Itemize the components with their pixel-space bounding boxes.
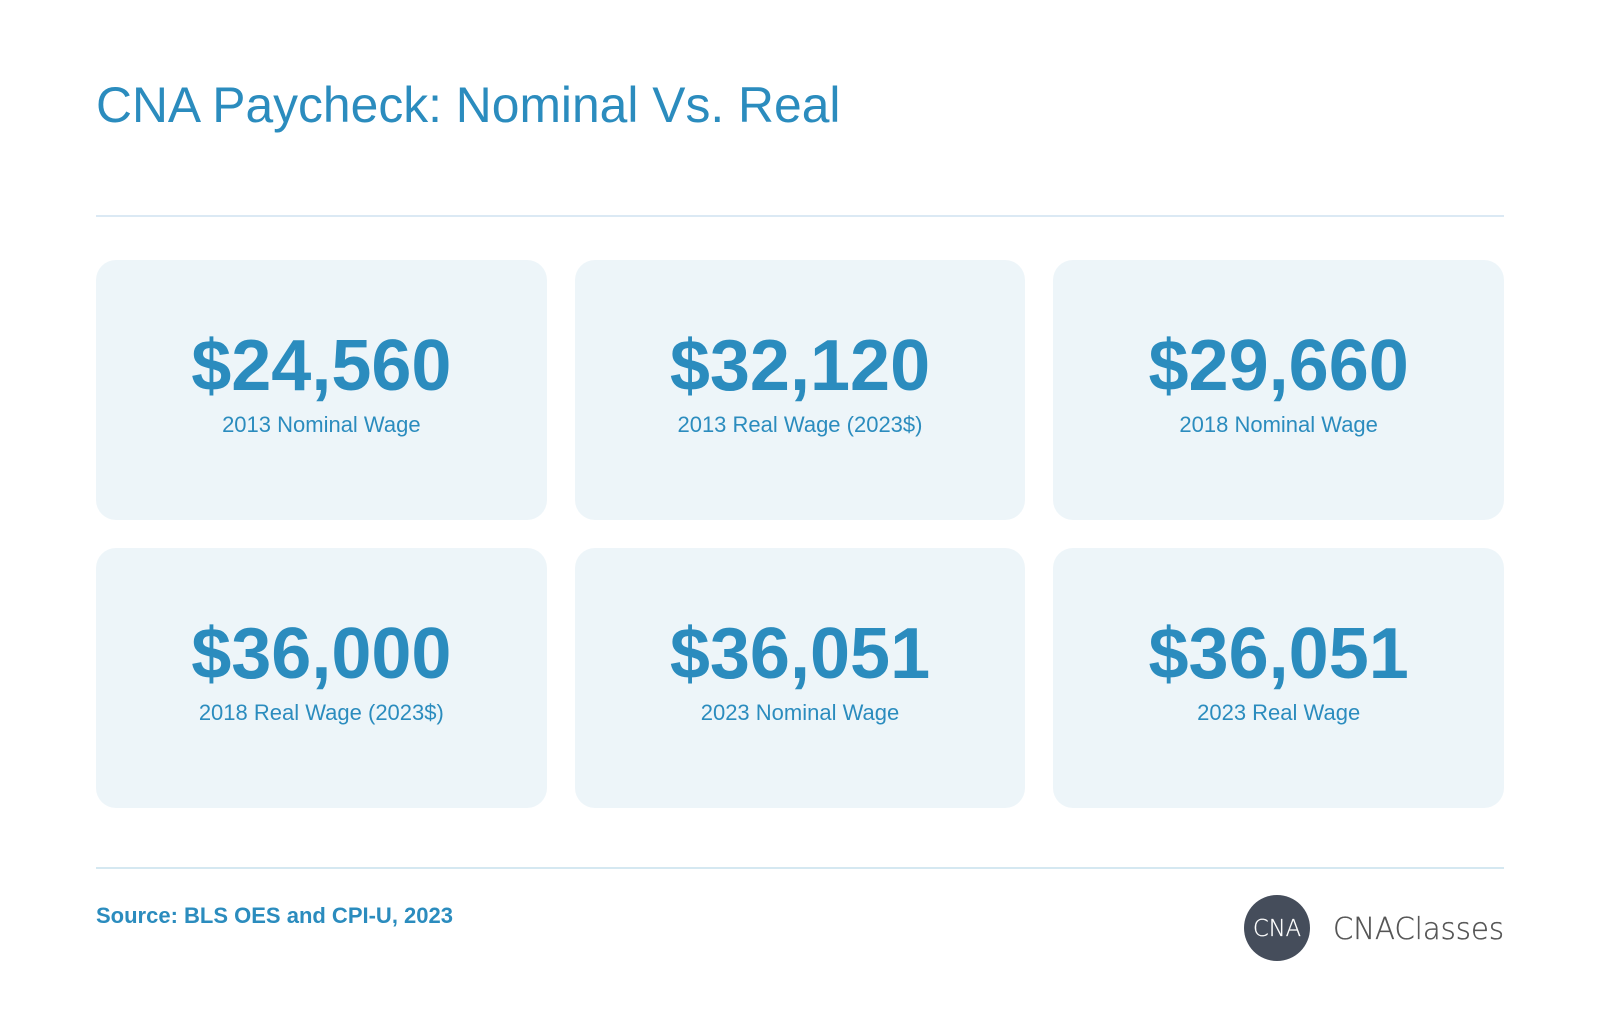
- label: 2013 Real Wage (2023$): [677, 412, 922, 437]
- value: $32,120: [670, 326, 930, 406]
- panel: 2013 nominal wage: [96, 260, 547, 520]
- logo wordmark: CNAClasses: [1333, 912, 1504, 947]
- label: 2023 Real Wage: [1197, 700, 1360, 725]
- value: $36,051: [670, 614, 930, 694]
- title: CNA Paycheck: Nominal Vs. Real: [96, 77, 840, 133]
- label: 2018 Real Wage (2023$): [199, 700, 444, 725]
- label: 2023 Nominal Wage: [701, 700, 899, 725]
- panel: 2013 real wage: [575, 260, 1025, 520]
- panel: 2023 nominal wage: [575, 548, 1025, 808]
- panel: 2018 nominal wage: [1053, 260, 1504, 520]
- source note: Source: BLS OES and CPI-U, 2023: [96, 903, 453, 928]
- value: $36,051: [1149, 614, 1409, 694]
- panel: 2018 real wage: [96, 548, 547, 808]
- label: 2018 Nominal Wage: [1179, 412, 1378, 437]
- value: $24,560: [191, 326, 451, 406]
- icon: logo badge: CNA: [1253, 916, 1301, 942]
- value: $29,660: [1149, 326, 1409, 406]
- value: $36,000: [191, 614, 451, 694]
- logo: CNAClasses: [1244, 895, 1504, 961]
- icon: logo badge: [1244, 895, 1310, 961]
- panel: 2023 real wage: [1053, 548, 1504, 808]
- label: 2013 Nominal Wage: [222, 412, 421, 437]
